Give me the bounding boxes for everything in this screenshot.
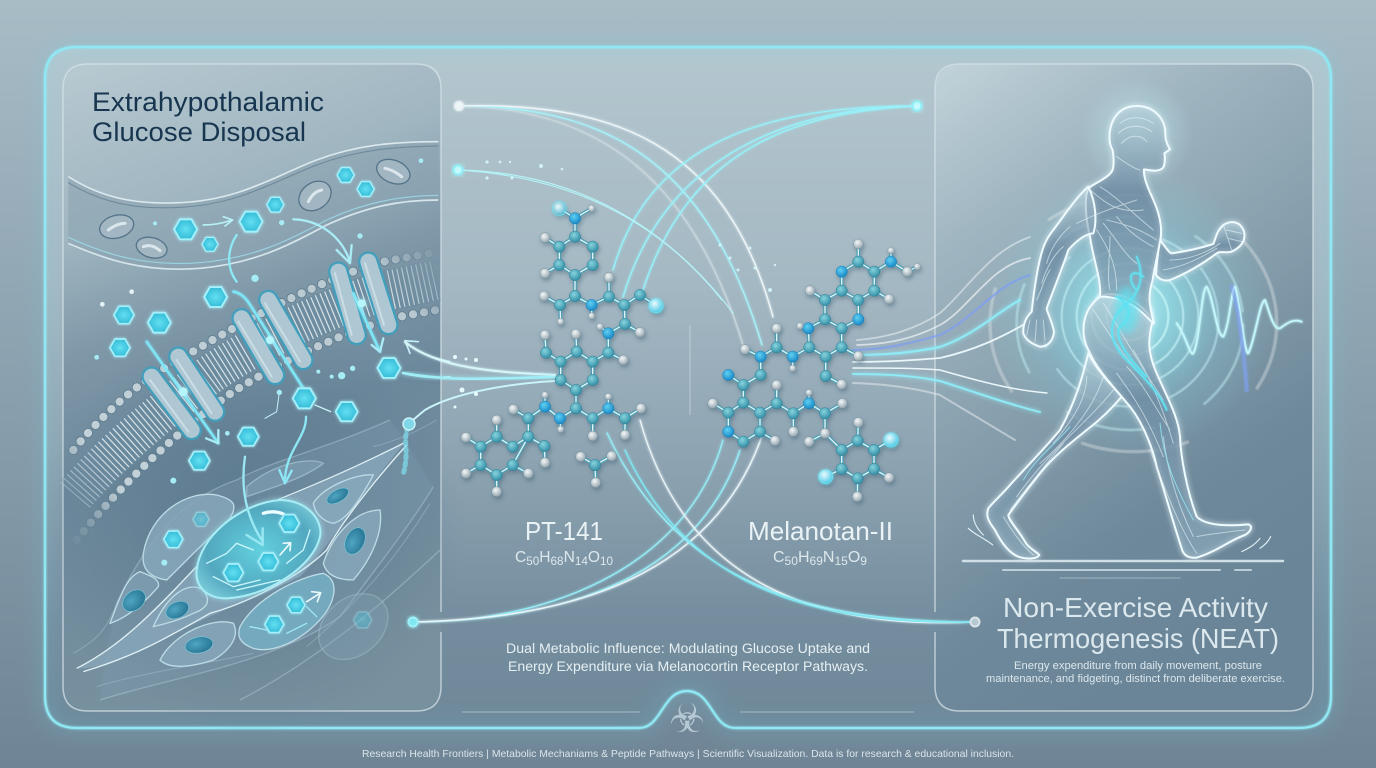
connector: cyan mid-left to Melanotan-II [458, 170, 733, 313]
formula: Melanotan-II: C [773, 549, 785, 566]
connector end nodes [408, 102, 980, 626]
uptake arrows [203, 217, 450, 602]
formula: PT-141: O [588, 549, 600, 566]
glucose hexagons [110, 168, 400, 633]
walking figure [987, 106, 1251, 558]
molecule: PT-141 structure [461, 201, 663, 497]
connector: cyan top-right to PT-141 [613, 106, 917, 297]
formula: PT-141: C [515, 549, 527, 566]
small particles [94, 158, 423, 566]
formula: PT-141: N [564, 549, 575, 566]
icon: biohazard emblem: ☣ [669, 696, 705, 742]
illustration: walking body with energy rings [968, 77, 1302, 558]
panel: right glass panel [935, 64, 1313, 711]
centre divider [689, 325, 691, 415]
muscle cells [110, 461, 401, 673]
molecule: Melanotan-II structure [708, 239, 921, 502]
formula: Melanotan-II: 69 [810, 554, 823, 568]
formula: PT-141: 68 [551, 554, 564, 568]
caption: dual metabolic influence: Dual Metabolic Influence: Modulating Glucose Uptake and [506, 641, 870, 656]
energy flow from molecule to body [853, 237, 1047, 440]
formula: Melanotan-II: 50 [785, 554, 798, 568]
glow spots on proteins [179, 299, 366, 396]
membrane transporter proteins [147, 262, 388, 443]
foot motion marks [968, 515, 1271, 552]
panel: left glass panel [63, 64, 441, 711]
cell membrane [73, 252, 438, 540]
dark backdrop [40, 320, 467, 733]
illustration: glucose uptake through membrane into muscle [40, 142, 467, 733]
caption: dual metabolic influence: Energy Expenditure via Melanocortin Receptor Pathways. [508, 659, 868, 674]
concentric energy rings [990, 195, 1277, 452]
description: NEAT: maintenance, and fidgeting, distinct from deliberate exercise. [986, 673, 1285, 685]
abdomen energy core [1115, 287, 1139, 333]
connector: white bottom-right to PT-141 [607, 420, 975, 623]
formula: Melanotan-II: N [823, 549, 834, 566]
muscle fibres [73, 420, 440, 700]
formula: PT-141: 10 [600, 554, 613, 568]
red blood cells [97, 155, 414, 261]
ground lines [963, 561, 1283, 578]
muscle and nerve lines [1003, 118, 1245, 555]
glowing central muscle cell [197, 500, 320, 598]
formula: PT-141: 50 [526, 554, 540, 568]
connector: cyan bottom-left to Melanotan-II [413, 433, 763, 622]
flow lines from PT-141 to glucose panel [403, 342, 555, 475]
label: PT-141: PT-141 [525, 516, 603, 546]
label: Melanotan-II: Melanotan-II [748, 516, 893, 546]
formula: PT-141: 14 [575, 554, 588, 568]
formula: Melanotan-II: 15 [834, 554, 848, 568]
heading: Extrahypothalamic Glucose Disposal: Extrahypothalamic [92, 87, 324, 117]
heading: Non-Exercise Activity Thermogenesis (NEAT): Non-Exercise Activity [1003, 592, 1268, 623]
formula: Melanotan-II: H [798, 549, 810, 566]
head halo [1080, 77, 1193, 190]
formula: PT-141: H [539, 549, 551, 566]
connector: white top-left to Melanotan-II [458, 106, 773, 345]
footer: Research Health Frontiers | Metabolic Mechaniams & Peptide Pathways | Scientific Visualization. Data is for research & educational inclusion. [362, 748, 1014, 760]
description: NEAT: Energy expenditure from daily movement, posture [1014, 660, 1262, 672]
heading: Extrahypothalamic Glucose Disposal: Glucose Disposal [92, 117, 306, 147]
internal glucose traces [207, 512, 317, 633]
energy glow [987, 167, 1273, 453]
curved connector bundles [408, 102, 980, 626]
heading: Non-Exercise Activity Thermogenesis (NEAT): Thermogenesis (NEAT) [997, 623, 1279, 654]
divider lines beside emblem [462, 711, 914, 713]
nuclei [118, 485, 369, 655]
blood vessel [68, 142, 438, 269]
formula: Melanotan-II: 9 [860, 554, 867, 568]
formula: Melanotan-II: O [848, 549, 860, 566]
energy waveform [1177, 287, 1302, 390]
sparkle particles near top connectors [485, 160, 776, 292]
